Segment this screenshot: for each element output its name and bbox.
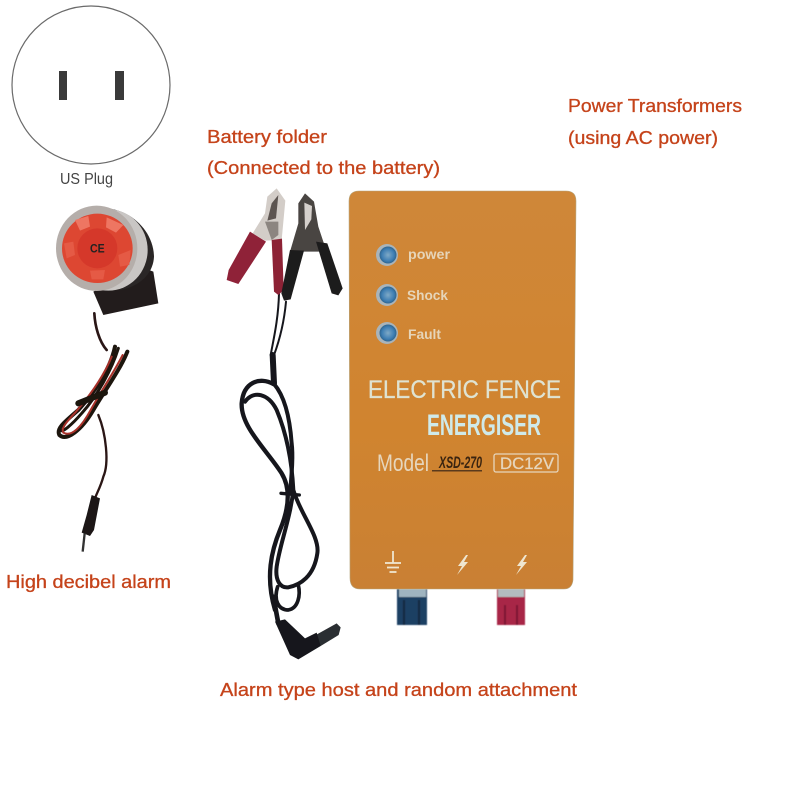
product name: [368, 376, 561, 442]
red clip: [227, 188, 285, 295]
model line: Model: [377, 450, 429, 477]
label: alarm type host: Alarm type host and random attachment: [220, 680, 577, 700]
panel: energiser unit: [349, 191, 576, 625]
LED: power: [376, 244, 451, 266]
product name: ENERGISER: [427, 409, 541, 442]
icon: ground symbol: [385, 551, 401, 572]
housing: [349, 191, 576, 589]
icon: high decibel alarm siren: [56, 206, 158, 552]
icon: US plug: [12, 6, 170, 164]
LED: shock: Shock: [407, 288, 448, 303]
terminal posts: [397, 589, 525, 625]
label: battery folder: Battery folder: [207, 127, 327, 147]
siren vents: [64, 216, 131, 279]
LED: power: power: [408, 247, 451, 262]
siren body: [107, 208, 154, 290]
LED: fault: Fault: [408, 327, 442, 342]
label: power transformers: (using AC power): [568, 128, 718, 148]
model line: XSD-270: [438, 453, 482, 472]
label: battery folder: (Connected to the battery): [207, 158, 440, 178]
icon: lightning bolt right: [516, 555, 527, 575]
label: battery folder: [207, 127, 440, 178]
alarm wire: [59, 313, 127, 498]
right-angle DC plug: [275, 619, 341, 659]
icon: battery clips and cable: [227, 188, 343, 659]
icon: lightning bolt left: [457, 555, 468, 575]
cable: [242, 293, 318, 623]
label: power transformers: Power Transformers: [568, 96, 742, 116]
LED: fault: [376, 322, 442, 344]
CE mark: CE: [90, 242, 105, 256]
label: high decibel alarm: High decibel alarm: [6, 572, 171, 592]
label: power transformers: [568, 96, 742, 148]
black clip: [281, 193, 343, 301]
LED: shock: [376, 284, 448, 306]
label: US Plug: US Plug: [60, 171, 113, 188]
model line: DC12V: [500, 454, 555, 473]
siren bracket: [93, 267, 158, 315]
model line: [377, 450, 558, 477]
product name: ELECTRIC FENCE: [368, 376, 561, 404]
audio plug: [82, 495, 100, 536]
